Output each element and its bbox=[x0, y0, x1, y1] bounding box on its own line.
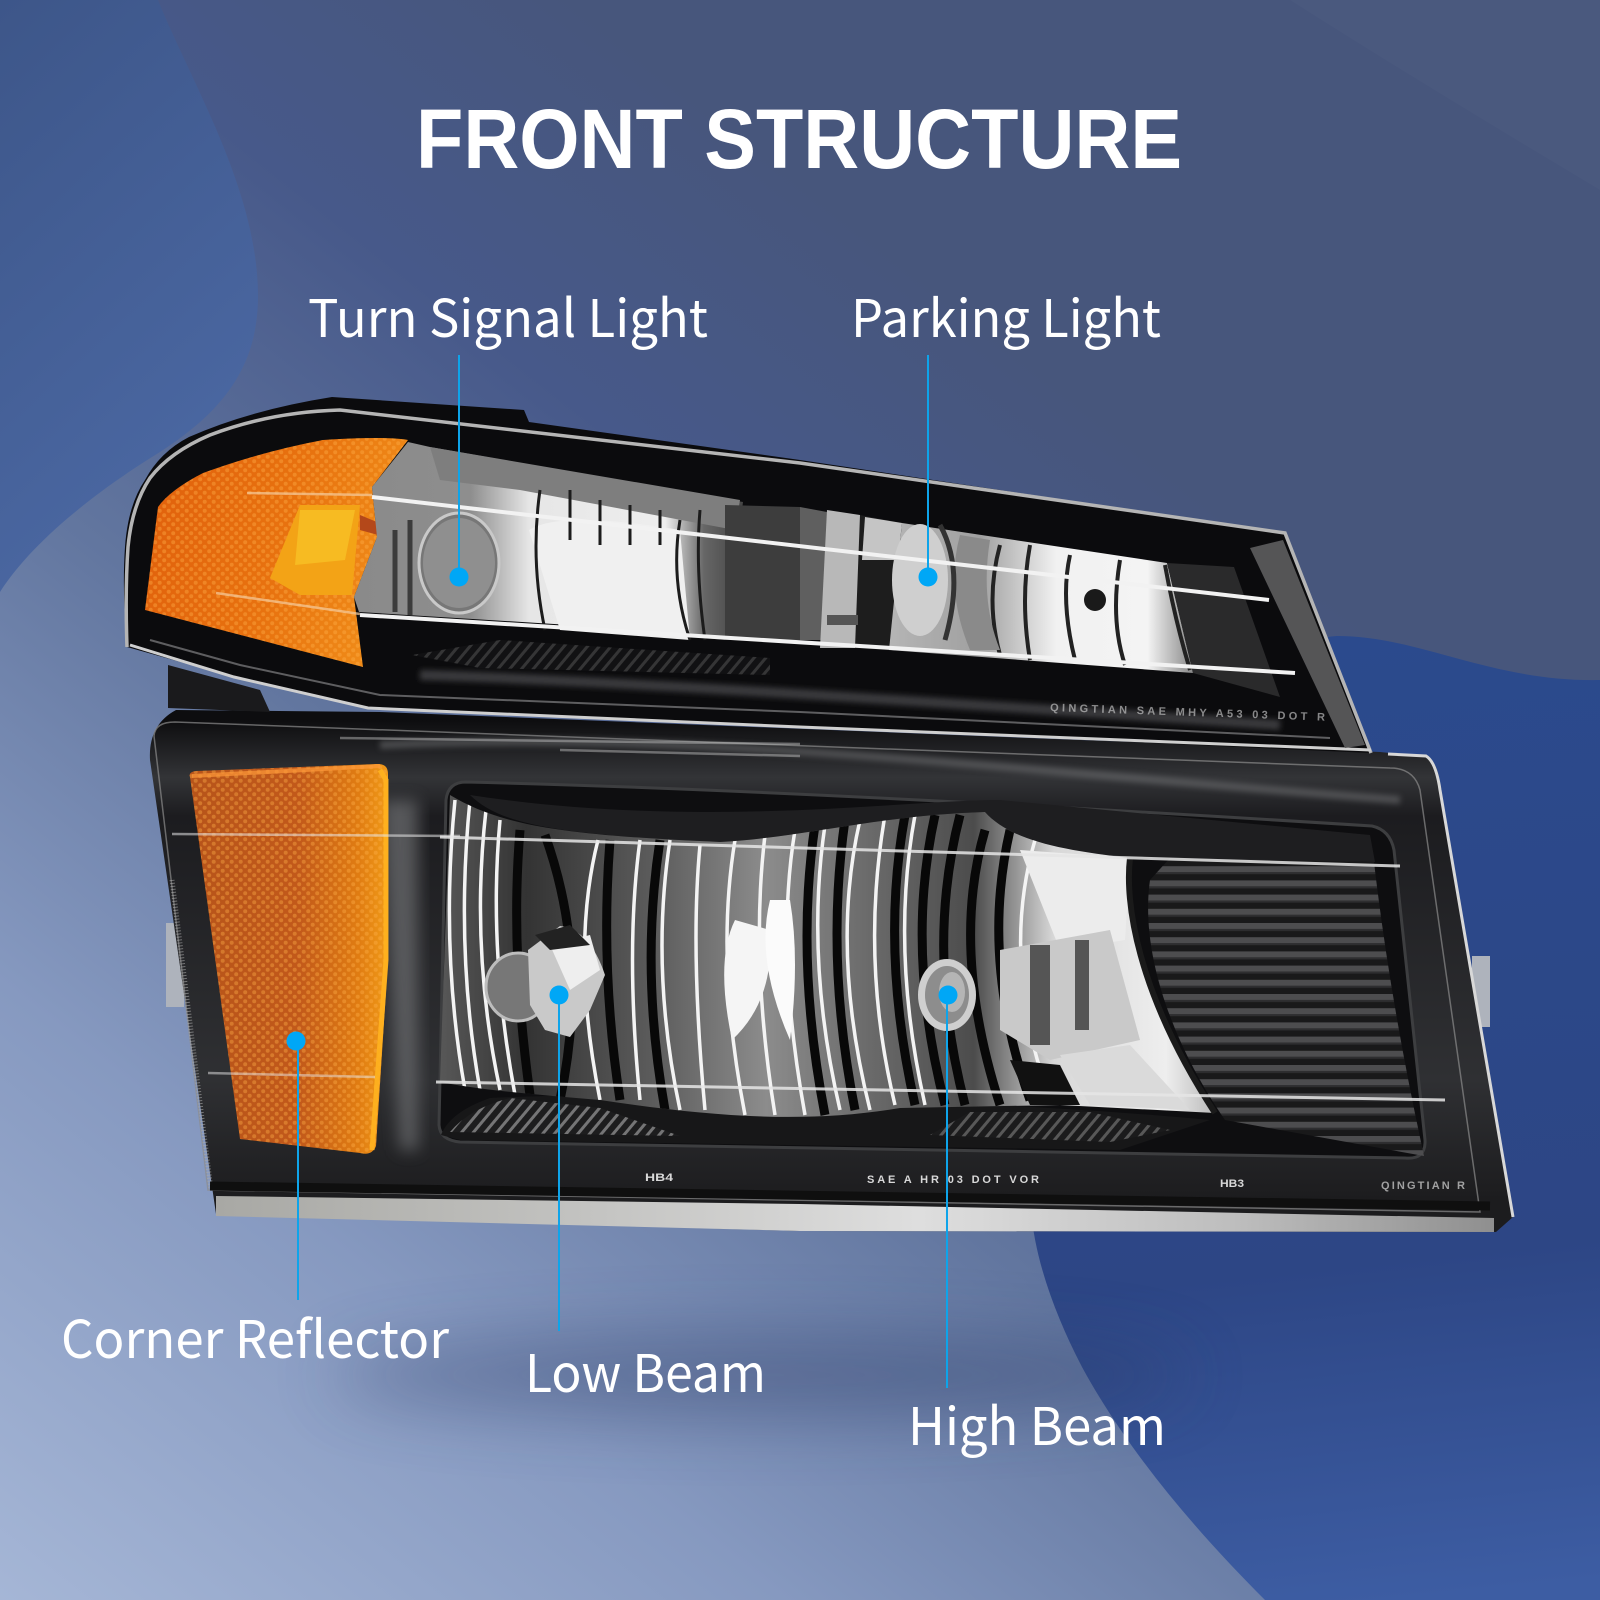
rear bracket bbox=[168, 665, 270, 712]
callout: parking light: Parking Light bbox=[851, 277, 1161, 352]
ground shadow bbox=[330, 1335, 1190, 1415]
reflection lines on lower lamp bbox=[172, 834, 460, 836]
side mounting tabs bbox=[166, 923, 1490, 1027]
callout: parking light bbox=[851, 277, 1161, 586]
lens markings bbox=[645, 1172, 1465, 1192]
low beam bulb bbox=[486, 925, 605, 1037]
main lens recess bbox=[439, 782, 1425, 1158]
upper lens markings: QINGTIAN SAE MHY A53 03 DOT R bbox=[1050, 702, 1325, 724]
lens top shading bbox=[470, 795, 1375, 862]
title: FRONT STRUCTURE bbox=[416, 92, 1182, 186]
corner reflector amber bbox=[190, 764, 388, 1154]
lens markings: HB4 bbox=[645, 1172, 674, 1184]
callout: high beam bbox=[908, 986, 1166, 1460]
turn signal amber lens bbox=[145, 438, 408, 667]
callout: high beam: High Beam bbox=[908, 1385, 1166, 1460]
lens markings: HB3 bbox=[1220, 1178, 1244, 1190]
lens markings: SAE A HR 03 DOT VOR bbox=[867, 1174, 1039, 1186]
turn signal chrome reflector bbox=[354, 442, 743, 640]
callout: low beam bbox=[525, 986, 766, 1407]
callout: turn signal light: Turn Signal Light bbox=[308, 277, 708, 352]
lower lamp housing bbox=[150, 710, 1513, 1232]
centre shield bbox=[725, 505, 902, 650]
parking bulb bbox=[892, 524, 954, 640]
callout: turn signal light bbox=[308, 277, 708, 586]
callout: low beam: Low Beam bbox=[525, 1332, 766, 1407]
silver bottom strip bbox=[216, 1196, 1494, 1232]
ribbed right panel bbox=[1148, 858, 1424, 1156]
upper headlamp bbox=[124, 397, 1371, 753]
turn signal bulb bbox=[419, 513, 499, 613]
parking light chrome reflector bbox=[889, 523, 1193, 673]
callout: corner reflector: Corner Reflector bbox=[61, 1298, 450, 1373]
high beam bulb bbox=[918, 959, 976, 1031]
right ribbed dark panel bbox=[1167, 563, 1280, 697]
upper lamp housing bbox=[124, 397, 1371, 753]
reflector hole bbox=[1084, 589, 1106, 611]
lens markings: QINGTIAN R bbox=[1381, 1180, 1465, 1192]
reflection lines on upper lamp bbox=[247, 493, 372, 495]
lower headlamp bbox=[150, 710, 1513, 1232]
housing highlights bbox=[380, 742, 1400, 800]
lower bezel reflector texture bbox=[412, 640, 770, 675]
callout: corner reflector bbox=[61, 1032, 450, 1373]
lower diagonal reflector strip bbox=[441, 1095, 1210, 1150]
chrome reflector bbox=[430, 790, 1230, 1130]
